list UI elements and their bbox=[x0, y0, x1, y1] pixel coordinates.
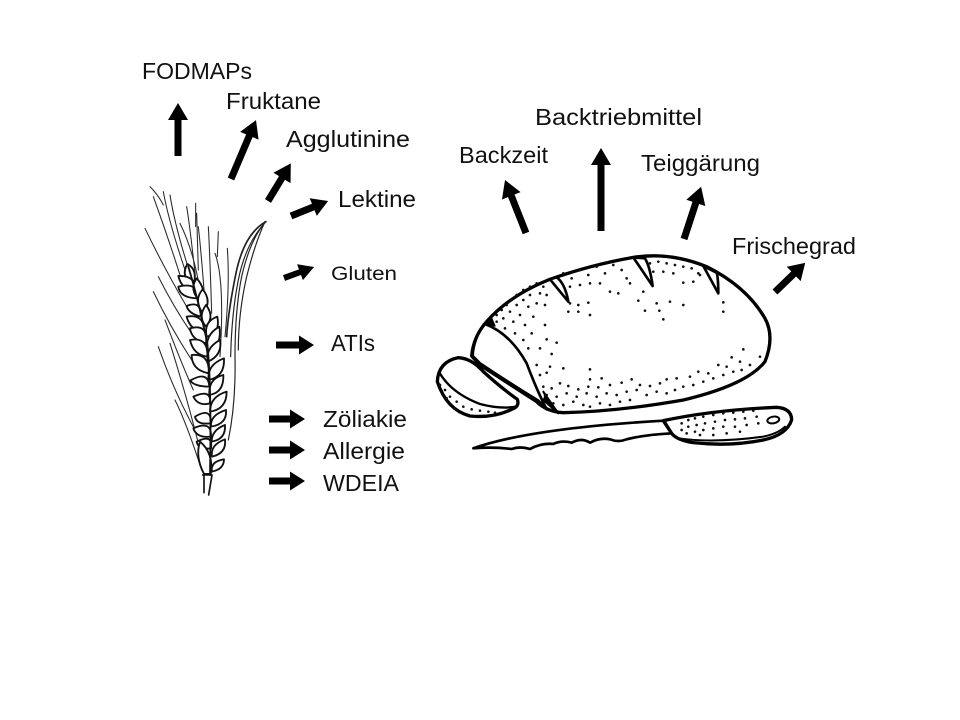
handle bbox=[663, 407, 792, 444]
arrow: Lektine bbox=[287, 192, 332, 225]
label: Backzeit: Backzeit bbox=[459, 142, 549, 168]
arrow: FODMAPs bbox=[168, 103, 188, 156]
arrows: bread factors bbox=[496, 148, 812, 299]
arrow: WDEIA bbox=[269, 472, 305, 490]
loaf outline bbox=[472, 256, 770, 413]
label: Lektine: Lektine bbox=[338, 186, 416, 212]
arrow: Agglutinine bbox=[259, 158, 299, 206]
crust stipple bbox=[497, 262, 723, 375]
arrow: Frischegrad bbox=[768, 256, 812, 299]
label: Agglutinine: Agglutinine bbox=[286, 126, 410, 152]
label: Fruktane: Fruktane bbox=[226, 88, 321, 114]
arrow: Gluten bbox=[281, 259, 317, 286]
arrow: Teiggärung bbox=[674, 184, 711, 242]
label: Backtriebmittel: Backtriebmittel bbox=[535, 104, 702, 130]
knife bbox=[473, 407, 792, 449]
kernels bbox=[178, 264, 227, 474]
label: Gluten: Gluten bbox=[331, 264, 397, 285]
label: Teiggärung: Teiggärung bbox=[641, 150, 760, 176]
label: ATIs: ATIs bbox=[331, 330, 375, 356]
cut face bbox=[473, 324, 547, 409]
flag leaf bbox=[227, 222, 266, 440]
arrow: ATIs bbox=[276, 336, 314, 354]
arrow: Backtriebmittel bbox=[591, 148, 611, 231]
labels: wheat components bbox=[142, 58, 416, 496]
arrow: Fruktane bbox=[222, 116, 265, 183]
icon: bread loaf with slice and knife bbox=[437, 256, 792, 449]
label: FODMAPs: FODMAPs bbox=[142, 58, 252, 84]
label: Allergie: Allergie bbox=[323, 438, 405, 464]
label: WDEIA: WDEIA bbox=[323, 470, 400, 496]
arrows: wheat components bbox=[168, 103, 332, 490]
blade bbox=[473, 421, 672, 449]
icon: wheat ear bbox=[145, 187, 266, 495]
slice bbox=[437, 358, 518, 416]
score cuts bbox=[550, 277, 568, 302]
arrow: Zöliakie bbox=[269, 410, 305, 428]
arrow: Backzeit bbox=[496, 176, 535, 237]
label: Zöliakie: Zöliakie bbox=[323, 406, 407, 432]
label: Frischegrad: Frischegrad bbox=[732, 233, 856, 259]
labels: bread factors bbox=[459, 104, 856, 259]
arrow: Allergie bbox=[269, 440, 305, 460]
